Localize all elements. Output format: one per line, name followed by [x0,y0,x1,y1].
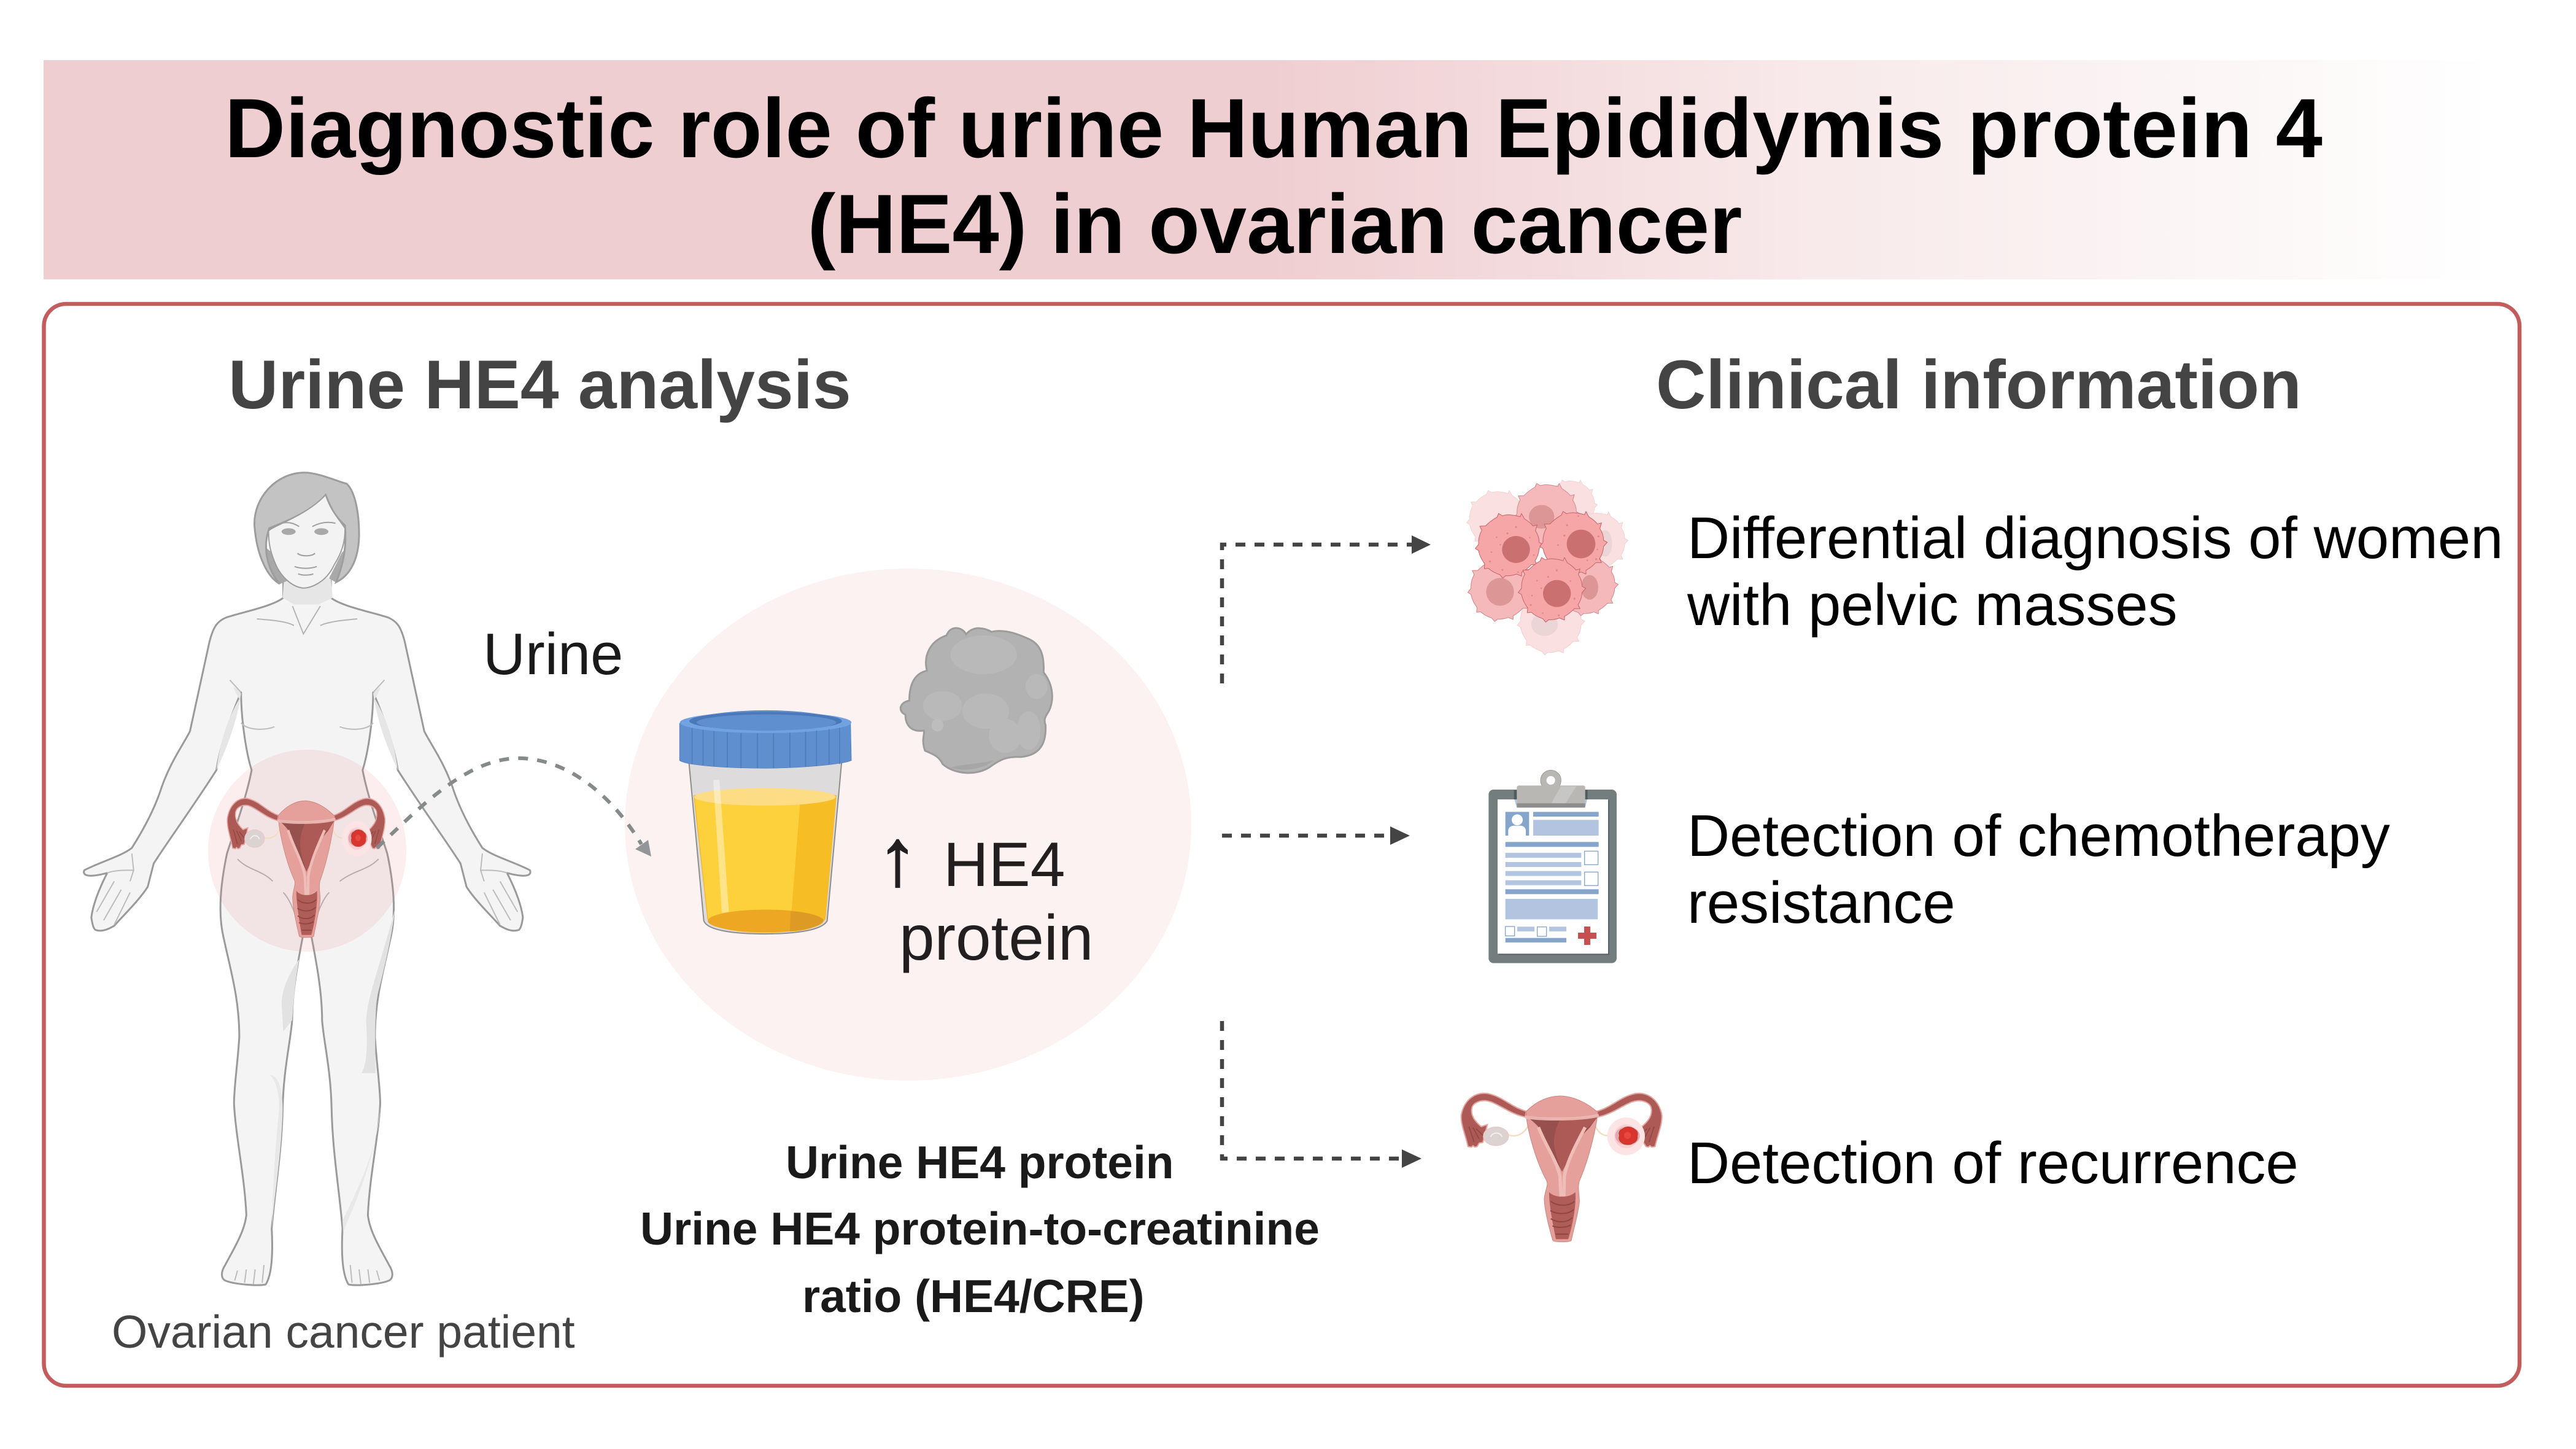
text block: urine HE4 measures: Urine HE4 protein-to-creatinine [640,1203,1320,1254]
icon: grey tumor protein blob [900,628,1052,773]
text: chemotherapy resistance: resistance [1687,870,1955,936]
text block: urine HE4 measures [640,1136,1320,1322]
text: differential diagnosis [1687,505,2503,638]
label: increased HE4 protein: protein [899,902,1093,973]
heading: Clinical information: Clinical information [1656,346,2302,423]
label: increased HE4 protein: HE4 [943,829,1065,899]
arrow: to recurrence [1222,1021,1421,1168]
icon: tumor cell cluster [1467,480,1628,655]
text block: urine HE4 measures: Urine HE4 protein [786,1136,1174,1188]
panel: urine sample circle [625,569,1191,1081]
arrow: to differential diagnosis [1222,535,1431,683]
text: chemotherapy resistance [1687,803,2390,936]
icon: urine specimen cup [679,710,851,934]
title text: Diagnostic role of urine Human Epididymis protein 4 [225,82,2323,176]
title banner: (HE4) in ovarian cancer [808,177,1742,271]
heading: Urine HE4 analysis: Urine HE4 analysis [228,346,851,423]
arrow: to chemotherapy resistance [1222,826,1410,845]
icon: uterus with ovarian tumor [1461,1094,1662,1242]
text: differential diagnosis: Differential diagnosis of women [1687,505,2503,571]
panel: main content frame [44,304,2520,1386]
figure: ovarian cancer patient body [84,473,530,1285]
text block: urine HE4 measures: ratio (HE4/CRE) [802,1270,1145,1322]
organ: uterus in patient [227,798,385,938]
icon: clinical clipboard [1488,770,1617,963]
text: differential diagnosis: with pelvic masses [1687,572,2178,638]
text: recurrence: Detection of recurrence [1687,1130,2299,1196]
title banner [44,60,2493,279]
face [269,495,345,588]
text: chemotherapy resistance: Detection of chemotherapy [1687,803,2390,869]
label: increased HE4 protein: ↑ [878,812,918,902]
label: Urine: Urine [483,622,623,687]
arrow: curved dashed from ovary to sample [377,758,651,857]
label: increased HE4 protein [878,812,1093,973]
hair [254,473,359,584]
highlight: pelvic region [208,750,406,952]
label: Ovarian cancer patient: Ovarian cancer patient [112,1306,575,1358]
